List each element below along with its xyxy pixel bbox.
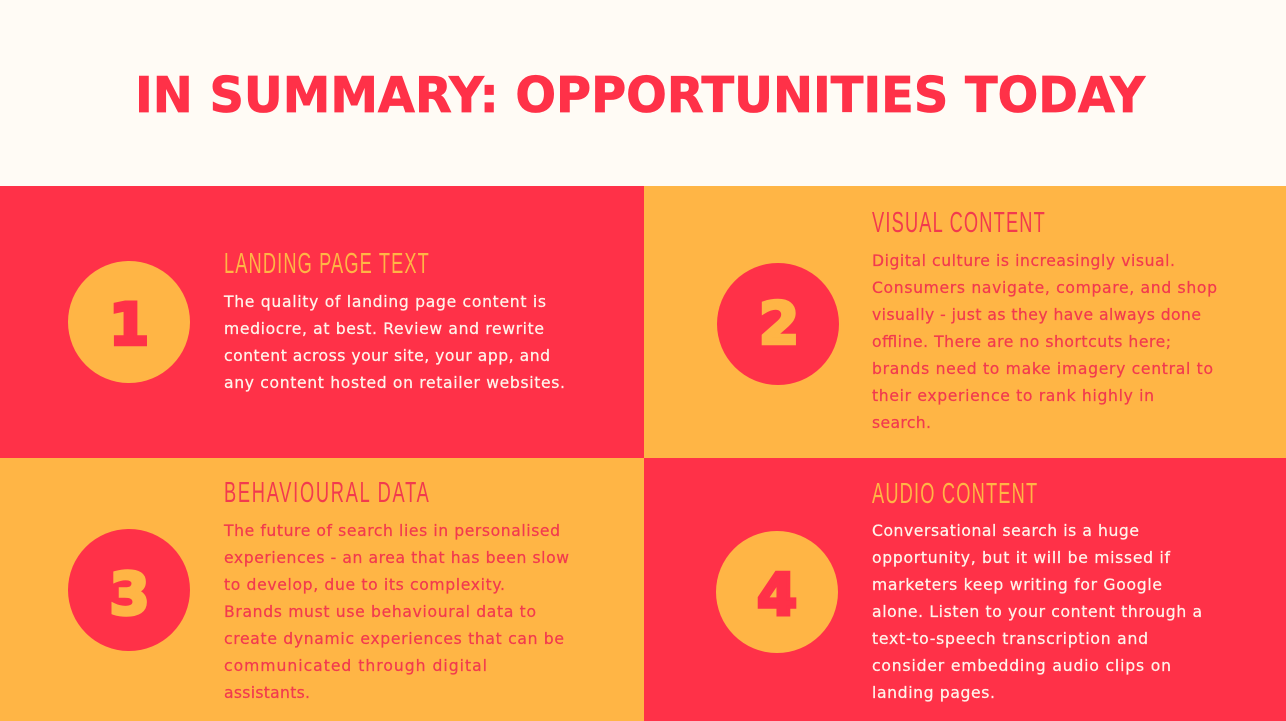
text block: behavioural data: The future of search lies in personalised xyxy=(223,522,560,540)
icon: number 1 badge: 1 xyxy=(109,290,149,358)
title: IN SUMMARY: OPPORTUNITIES TODAY xyxy=(135,67,1145,124)
text block: visual content: visually - just as they have always done xyxy=(872,306,1201,324)
panel: behavioural data xyxy=(0,458,644,721)
text block: behavioural data: assistants. xyxy=(224,684,310,702)
text block: audio content: alone. Listen to your content through a xyxy=(872,603,1202,621)
heading: landing page text: LANDING PAGE TEXT xyxy=(224,248,429,280)
icon: number 4 badge xyxy=(716,531,838,653)
text block: visual content xyxy=(872,252,1217,432)
text block: audio content: text-to-speech transcription and xyxy=(872,630,1148,648)
heading: visual content: VISUAL CONTENT xyxy=(872,207,1045,239)
icon: number 3 badge: 3 xyxy=(109,560,150,628)
icon: number 2 badge xyxy=(717,263,839,385)
icon: number 4 badge: 4 xyxy=(757,560,797,628)
text block: visual content: Digital culture is increasingly visual. xyxy=(872,252,1175,270)
text block: visual content: Consumers navigate, compare, and shop xyxy=(872,279,1217,297)
text block: landing page text: any content hosted on retailer websites. xyxy=(224,374,565,392)
text block: audio content: landing pages. xyxy=(872,684,995,702)
icon: number 2 badge: 2 xyxy=(759,290,799,358)
text block: audio content: consider embedding audio clips on xyxy=(872,657,1171,675)
icon: number 1 badge xyxy=(68,261,190,383)
panel: audio content xyxy=(644,458,1286,721)
text block: behavioural data: experiences - an area that has been slow xyxy=(224,549,569,567)
panel: visual content xyxy=(644,186,1286,458)
text block: visual content: brands need to make imagery central to xyxy=(872,360,1213,378)
text block: audio content xyxy=(872,522,1202,702)
text block: behavioural data: create dynamic experiences that can be xyxy=(224,630,564,648)
text block: landing page text xyxy=(223,293,565,392)
text block: audio content: Conversational search is a huge xyxy=(872,522,1139,540)
text block: landing page text: The quality of landing page content is xyxy=(223,293,546,311)
text block: landing page text: mediocre, at best. Review and rewrite xyxy=(224,320,544,338)
text block: behavioural data: to develop, due to its complexity. xyxy=(224,576,505,594)
text block: visual content: their experience to rank highly in xyxy=(872,387,1154,405)
icon: number 3 badge xyxy=(68,529,190,651)
text block: landing page text: content across your site, your app, and xyxy=(224,347,550,365)
panel: landing page text xyxy=(0,186,644,458)
title xyxy=(0,0,1286,186)
heading: behavioural data: BEHAVIOURAL DATA xyxy=(224,477,429,509)
text block: behavioural data: communicated through digital xyxy=(224,657,487,675)
text block: audio content: marketers keep writing for Google xyxy=(872,576,1162,594)
text block: behavioural data xyxy=(223,522,569,702)
text block: audio content: opportunity, but it will be missed if xyxy=(872,549,1170,567)
text block: visual content: search. xyxy=(872,414,931,432)
text block: visual content: offline. There are no shortcuts here; xyxy=(872,333,1171,351)
heading: audio content: AUDIO CONTENT xyxy=(872,478,1037,510)
text block: behavioural data: Brands must use behavioural data to xyxy=(224,603,536,621)
